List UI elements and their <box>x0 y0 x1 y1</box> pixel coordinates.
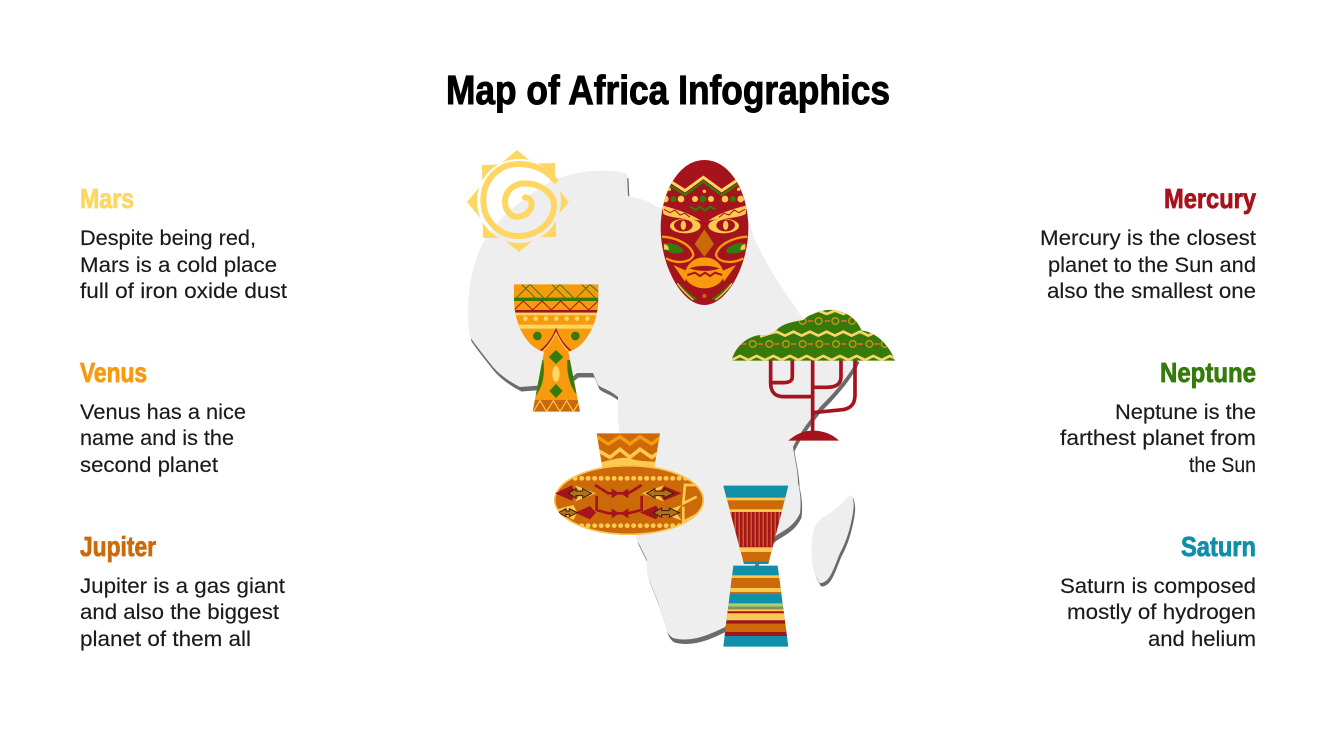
heading: Mars: Mars <box>80 183 134 214</box>
text: Neptune description <box>1060 401 1256 477</box>
panel: Jupiter <box>80 531 285 651</box>
text: Mars description <box>80 227 287 303</box>
text: Mars description: Mars is a cold place <box>80 254 277 277</box>
icon: vase <box>554 433 704 535</box>
icon: tree <box>732 310 898 441</box>
panel: Neptune <box>1060 357 1256 477</box>
text: Mars description: full of iron oxide dust <box>80 280 287 303</box>
text: Neptune description: the Sun <box>1189 454 1256 477</box>
text: Venus description: name and is the <box>80 427 234 450</box>
text: Neptune description: farthest planet from <box>1060 427 1256 450</box>
icon: drum <box>723 486 788 647</box>
panel: Mercury <box>1040 183 1256 303</box>
text: Mercury description: planet to the Sun and <box>1048 254 1256 277</box>
panel: Mars <box>80 183 287 303</box>
heading: Saturn: Saturn <box>1181 531 1256 562</box>
heading: Jupiter: Jupiter <box>80 531 156 562</box>
text: Venus description: Venus has a nice <box>80 401 246 424</box>
text: Mercury description: also the smallest one <box>1047 280 1256 303</box>
text: Saturn description: Saturn is composed <box>1060 575 1256 598</box>
text: Mercury description <box>1040 227 1256 303</box>
text: Saturn description <box>1060 575 1256 651</box>
text: Saturn description: mostly of hydrogen <box>1067 601 1256 624</box>
text: Venus description: second planet <box>80 454 218 477</box>
text: Neptune description: Neptune is the <box>1115 401 1256 424</box>
text: Jupiter description: planet of them all <box>80 628 251 651</box>
map of Africa <box>468 171 860 644</box>
text: Mars description: Despite being red, <box>80 227 256 250</box>
panel: Venus <box>80 357 246 477</box>
text: Jupiter description: and also the biggest <box>80 601 279 624</box>
text: Mercury description: Mercury is the closest <box>1040 227 1256 250</box>
heading: Mercury: Mercury <box>1164 183 1256 214</box>
text: Jupiter description: Jupiter is a gas giant <box>80 575 285 598</box>
panel: Saturn <box>1060 531 1256 651</box>
island: Madagascar <box>812 495 855 586</box>
icon: goblet <box>513 284 600 413</box>
icon: sun <box>467 150 569 252</box>
heading: Venus: Venus <box>80 357 147 388</box>
text: Saturn description: and helium <box>1148 628 1256 651</box>
text: Venus description <box>80 401 246 477</box>
icon: mask <box>661 160 748 305</box>
title: Map of Africa Infographics <box>446 67 890 113</box>
text: Jupiter description <box>80 575 285 651</box>
heading: Neptune: Neptune <box>1160 357 1256 388</box>
